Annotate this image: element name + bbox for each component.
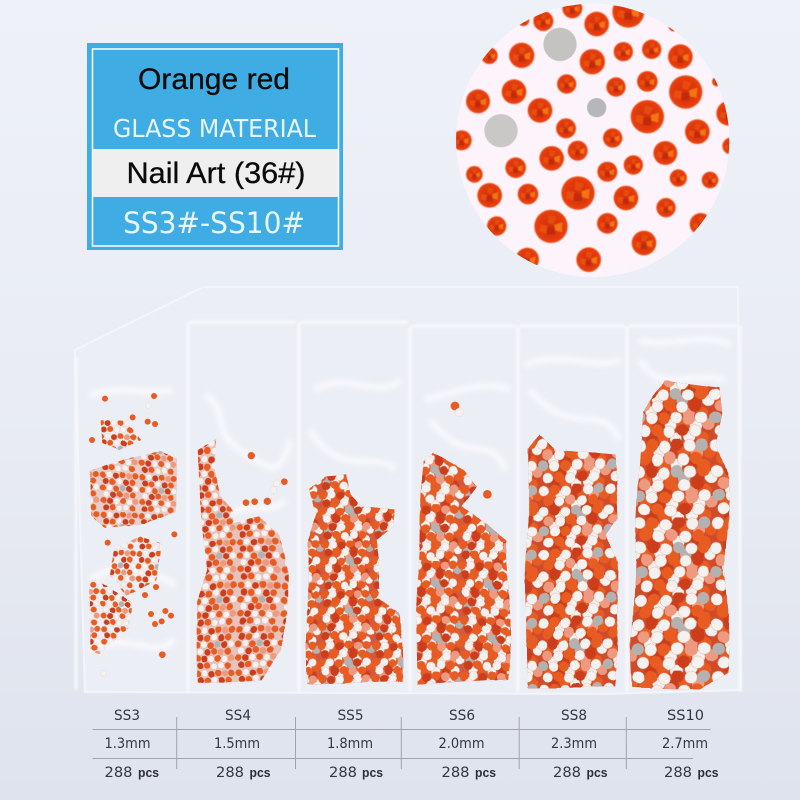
row: diameters: 2.7mm (662, 736, 708, 752)
row: size names: SS10 (667, 708, 704, 724)
rhinestones: SS4 pocket (197, 438, 288, 682)
text: size range: SS3#-SS10# (123, 206, 305, 240)
row: size names: SS3 (114, 708, 140, 724)
row: quantities: 288 (104, 765, 132, 781)
row: size names (114, 708, 704, 724)
row: quantities: pcs (586, 765, 608, 780)
text: product code: Nail Art (36#) (126, 157, 306, 190)
bag body (75, 287, 741, 694)
rhinestones: SS8 pocket (525, 433, 620, 687)
row: diameters: 1.3mm (104, 736, 150, 752)
rhinestones: SS10 pocket (632, 379, 728, 689)
row: size names: SS4 (225, 708, 251, 724)
row: diameters: 2.3mm (551, 736, 597, 752)
row: diameters: 1.5mm (214, 736, 260, 752)
row: size names: SS8 (561, 708, 587, 724)
rhinestones: SS3 pocket (88, 393, 177, 676)
panel: circular close-up of rhinestones (452, 0, 741, 277)
row: quantities: 288 (216, 765, 244, 781)
row: quantities: 288 (442, 765, 470, 781)
heading: colour name: Orange red (138, 63, 290, 96)
row: diameters: 2.0mm (438, 736, 484, 752)
row: quantities: pcs (250, 765, 270, 780)
row: quantities: pcs (698, 765, 718, 780)
row: quantities: 288 (664, 765, 692, 781)
panel: product info box (87, 43, 343, 250)
row: diameters (104, 736, 708, 752)
table: sizes, diameters and quantities (92, 708, 718, 781)
row: quantities: pcs (138, 765, 159, 780)
row: size names: SS5 (338, 708, 364, 724)
row: quantities: pcs (475, 765, 496, 780)
row: quantities: 288 (329, 765, 357, 781)
rhinestones: SS5 pocket (307, 473, 402, 684)
row: quantities: 288 (553, 765, 581, 781)
panel: six-pocket plastic bag of rhinestones (75, 287, 741, 694)
row: quantities (104, 765, 718, 781)
text: material: GLASS MATERIAL (113, 114, 316, 143)
row: quantities: pcs (362, 765, 383, 780)
row: size names: SS6 (449, 708, 475, 724)
row: diameters: 1.8mm (327, 736, 373, 752)
rhinestones: SS6 pocket (415, 402, 510, 685)
